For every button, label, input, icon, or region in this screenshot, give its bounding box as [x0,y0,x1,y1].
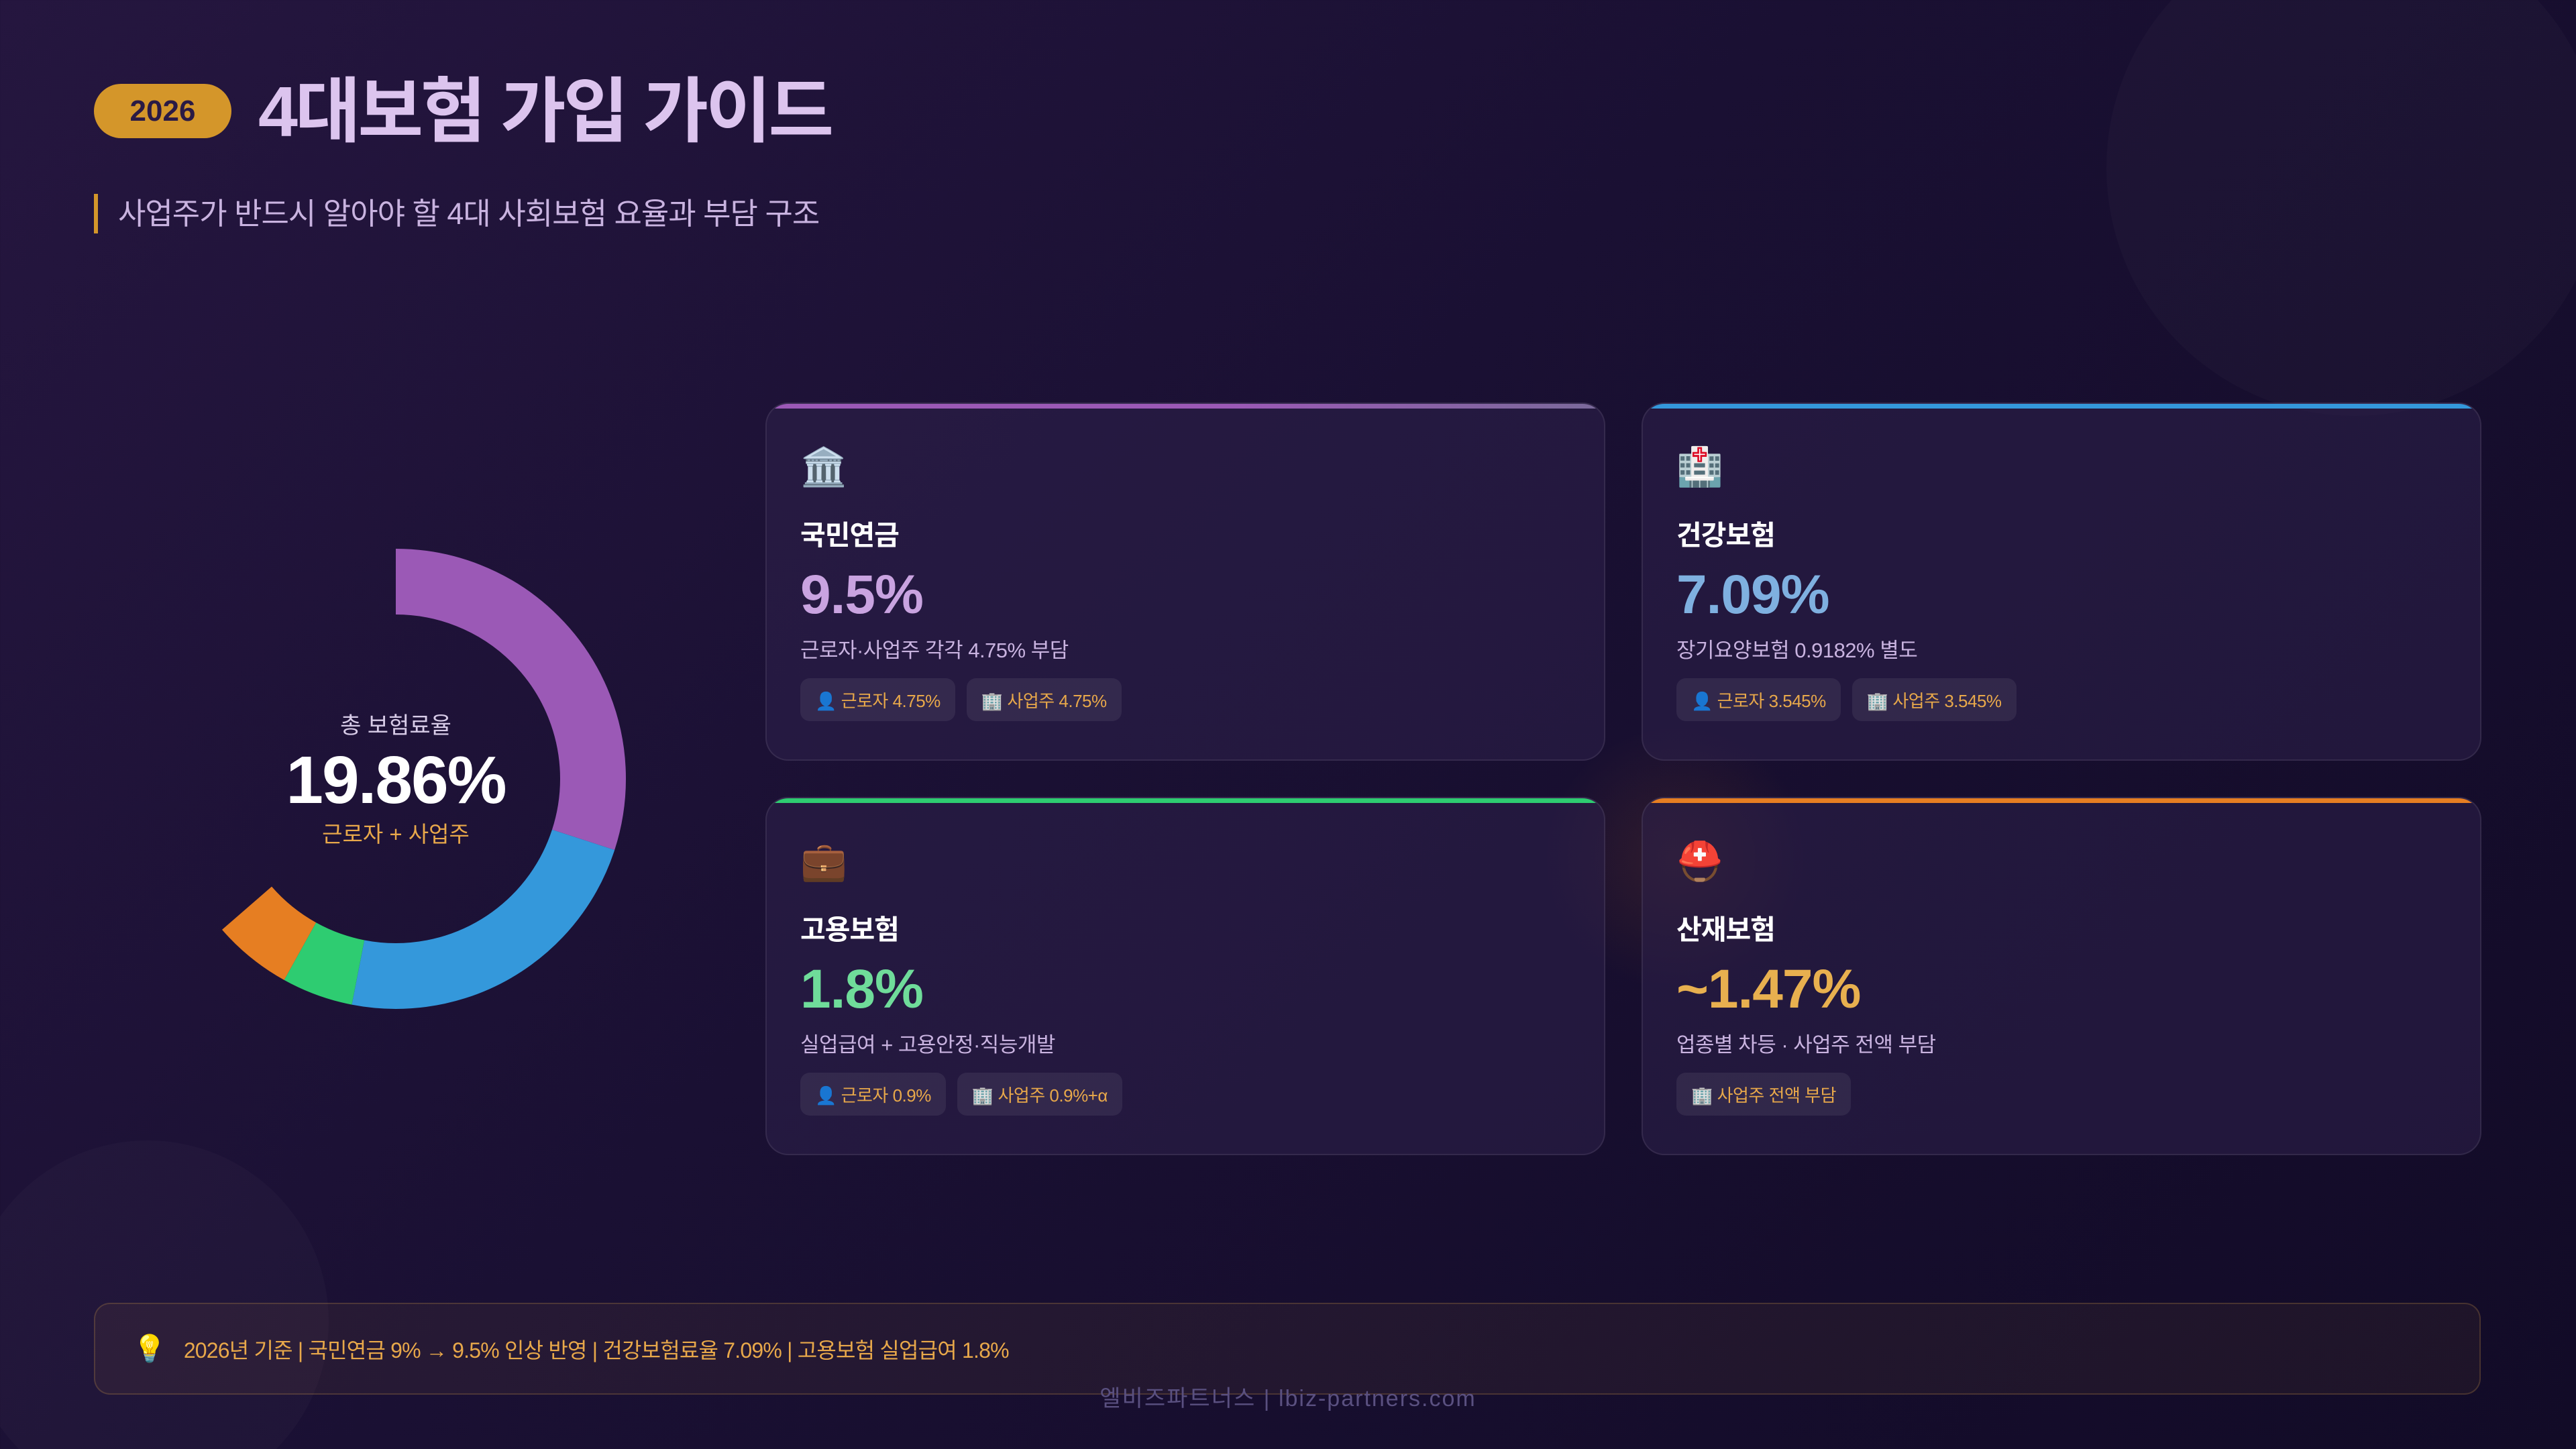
title: 4대보험 가입 가이드 [258,72,831,152]
credit: 엘비즈파트너스 | lbiz-partners.com [1099,1386,1477,1411]
panel: 국민연금: 🏢 사업주 4.75% [981,691,1107,711]
footer note: 💡 [133,1334,166,1364]
panel: 산재보험: ~1.47% [1676,959,1860,1020]
panel: 고용보험 [765,797,1605,1155]
decorative circle bottom-left [0,1140,329,1449]
icon: helmet: ⛑️ [1676,840,1723,882]
donut chart [222,549,626,1009]
subtitle: 사업주가 반드시 알아야 할 4대 사회보험 요율과 부담 구조 [118,197,819,231]
panel: 건강보험 [1642,402,2481,761]
footer note: 2026년 기준 | 국민연금 9% → 9.5% 인상 반영 | 건강보험료율 7.09% | 고용보험 실업급여 1.8% [184,1338,1009,1362]
header [94,72,831,233]
panel: 국민연금: 9.5% [800,564,923,625]
panel: 국민연금: 👤 근로자 4.75% [815,691,941,711]
decorative glow [1543,724,1811,993]
icon: briefcase: 💼 [800,840,847,882]
panel: 산재보험: 산재보험 [1676,914,1775,945]
panel: 산재보험: 업종별 차등 · 사업주 전액 부담 [1676,1033,1936,1057]
panel: 건강보험: 🏢 사업주 3.545% [1867,691,2002,711]
badge: 2026: 2026 [130,94,195,127]
panel: 건강보험: 장기요양보험 0.9182% 별도 [1676,639,1917,662]
panel: 국민연금: 근로자·사업주 각각 4.75% 부담 [800,639,1069,662]
icon: hospital: 🏥 [1676,445,1723,488]
donut center label: 19.86% [286,743,506,818]
badge: 2026 [94,84,231,138]
icon: building: 🏛️ [800,445,847,488]
panel: 고용보험: 🏢 사업주 0.9%+α [972,1085,1108,1106]
footer note [94,1303,2481,1395]
donut center label: 근로자 + 사업주 [322,822,470,847]
panel: 건강보험: 건강보험 [1676,520,1775,551]
panel: 고용보험: 실업급여 + 고용안정·직능개발 [800,1033,1055,1057]
panel: 고용보험: 👤 근로자 0.9% [815,1085,931,1106]
decorative circle top-right [2106,0,2576,416]
donut center label [286,713,506,847]
panel: 건강보험: 7.09% [1676,564,1829,625]
panel: 산재보험 [1642,797,2481,1155]
panel: 산재보험: 🏢 사업주 전액 부담 [1691,1085,1836,1106]
panel: 국민연금 [765,402,1605,761]
panel: 고용보험: 고용보험 [800,914,899,945]
panel: 국민연금: 국민연금 [800,520,899,551]
panel: 고용보험: 1.8% [800,959,923,1020]
donut center label: 총 보험료율 [340,713,451,739]
panel: 건강보험: 👤 근로자 3.545% [1691,691,1826,711]
